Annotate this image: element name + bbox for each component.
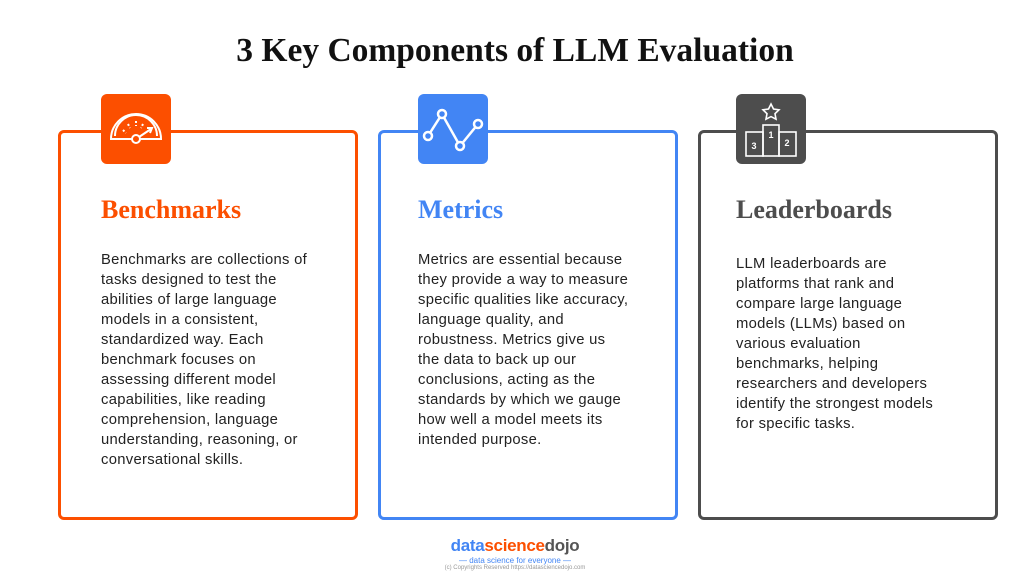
panel: leaderboards — [698, 130, 998, 520]
icon: podium: 3 — [751, 141, 757, 151]
logo: — data science for everyone — — [459, 556, 571, 565]
text: leaderboards: researchers and developers — [736, 376, 927, 392]
text: benchmarks: benchmark focuses on — [101, 352, 256, 368]
icon: podium: 2 — [784, 138, 790, 148]
icon: gauge — [101, 94, 171, 164]
heading: benchmarks: Benchmarks — [101, 195, 241, 224]
text: leaderboards: models (LLMs) based on — [736, 316, 905, 332]
text: metrics: they provide a way to measure — [418, 272, 628, 288]
heading: metrics: Metrics — [418, 195, 503, 224]
text: benchmarks — [101, 252, 307, 468]
icon: line chart — [418, 94, 488, 164]
text: metrics: robustness. Metrics give us — [418, 332, 605, 348]
text: benchmarks: assessing different model — [101, 372, 276, 388]
panel: benchmarks — [58, 130, 358, 520]
text: benchmarks: tasks designed to test the — [101, 272, 277, 288]
heading: leaderboards: Leaderboards — [736, 195, 892, 224]
text: leaderboards — [736, 256, 933, 432]
text: leaderboards: various evaluation — [736, 336, 861, 352]
panel: metrics — [378, 130, 678, 520]
logo: datasciencedojo — [451, 536, 579, 555]
text: metrics: language quality, and — [418, 312, 564, 328]
text: benchmarks: understanding, reasoning, or — [101, 432, 298, 448]
text: leaderboards: LLM leaderboards are — [736, 256, 887, 272]
text: metrics: conclusions, acting as the — [418, 372, 595, 388]
text: leaderboards: identify the strongest models — [736, 396, 933, 412]
text: metrics: the data to back up our — [418, 352, 576, 368]
text: benchmarks: comprehension, language — [101, 412, 278, 428]
text: metrics: how well a model meets its — [418, 412, 603, 428]
text: metrics: specific qualities like accuracy, — [418, 292, 628, 308]
text: benchmarks: abilities of large language — [101, 292, 277, 308]
text: metrics: intended purpose. — [418, 432, 542, 448]
text: leaderboards: platforms that rank and — [736, 276, 894, 292]
text: metrics: Metrics are essential because — [418, 252, 622, 268]
text: benchmarks: conversational skills. — [101, 452, 243, 468]
text: benchmarks: models in a consistent, — [101, 312, 258, 328]
text: benchmarks: Benchmarks are collections of — [101, 252, 307, 268]
text: leaderboards: for specific tasks. — [736, 416, 855, 432]
text: benchmarks: capabilities, like reading — [101, 392, 266, 408]
text: leaderboards: compare large language — [736, 296, 902, 312]
text: leaderboards: benchmarks, helping — [736, 356, 878, 372]
text: metrics — [418, 252, 628, 448]
icon: podium — [736, 94, 806, 164]
logo — [445, 536, 585, 571]
text: metrics: standards by which we gauge — [418, 392, 621, 408]
icon: podium: 1 — [768, 130, 774, 140]
text: benchmarks: standardized way. Each — [101, 332, 264, 348]
logo: (c) Copyrights Reserved https://datasciencedojo.com — [445, 565, 585, 571]
title: 3 Key Components of LLM Evaluation — [236, 32, 794, 69]
